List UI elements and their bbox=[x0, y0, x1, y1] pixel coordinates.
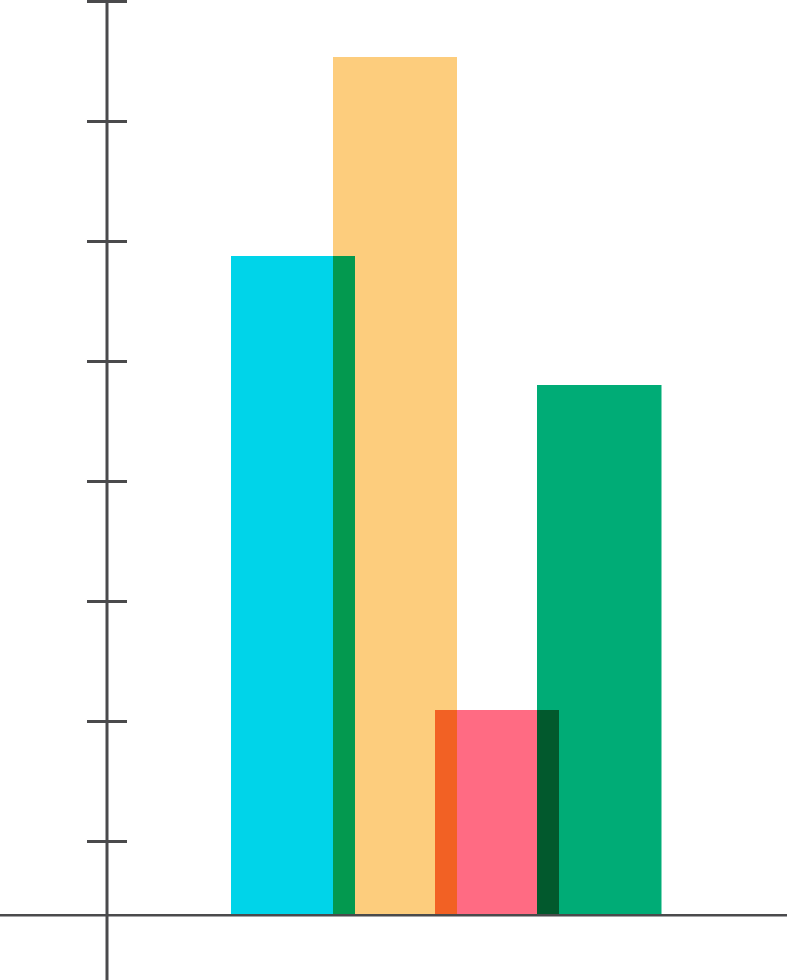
overlap: pink and green bbox=[537, 710, 559, 915]
bar: cyan bbox=[231, 256, 333, 915]
bar: green bbox=[537, 385, 662, 915]
bar: light orange bbox=[333, 57, 457, 915]
y axis with tick marks bbox=[87, 0, 127, 980]
overlap: pink and orange bbox=[435, 710, 457, 915]
bars group bbox=[231, 57, 662, 915]
x axis bbox=[0, 914, 787, 916]
bar: pink bbox=[457, 710, 537, 915]
overlap: cyan and orange bbox=[333, 256, 355, 915]
